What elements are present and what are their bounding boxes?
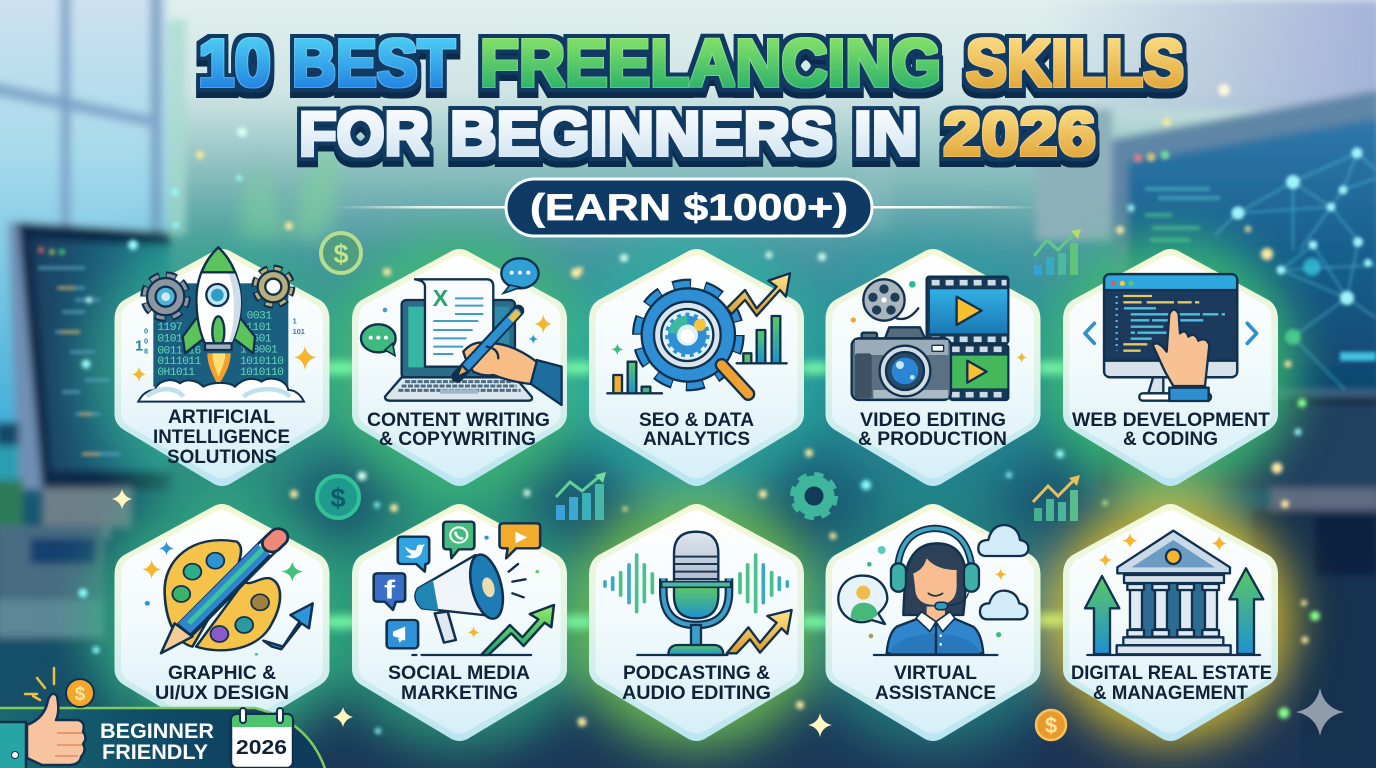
- title: 2026: [943, 100, 1096, 169]
- panel: seo and data analytics: [589, 249, 804, 486]
- title: BEST: [292, 26, 455, 101]
- panel: digital real estate and management: [1063, 504, 1278, 741]
- panel: social media marketing: [352, 504, 567, 741]
- label: UI/UX DESIGN: [155, 682, 289, 704]
- icon: megaphone with social bubbles: f: [384, 575, 396, 604]
- icon: rocket launching: [132, 247, 317, 402]
- label: & MANAGEMENT: [1093, 682, 1248, 704]
- hexagon card: [352, 504, 567, 741]
- decoration: gear: [793, 475, 835, 517]
- icon: rocket launching: 0: [144, 336, 148, 345]
- decoration: growth chart gold: [1033, 475, 1080, 521]
- decoration: gold coin: $: [1045, 713, 1057, 738]
- title: IN: [854, 100, 918, 169]
- subtitle pill with flanking lines: (EARN $1000+): [530, 187, 848, 228]
- icon: camera, film strip and reel: [851, 277, 1027, 400]
- icon: rocket launching: 1: [293, 316, 297, 325]
- icon: laptop with document and pen: [361, 258, 562, 405]
- label: ANALYTICS: [643, 428, 750, 450]
- icon: monitor with code and pointing hand: [1085, 274, 1257, 401]
- panel: web development and coding: [1063, 249, 1278, 486]
- label: CONTENT WRITING: [367, 409, 550, 431]
- decoration: grey sparkle: [1296, 688, 1344, 736]
- label: SOCIAL MEDIA: [388, 662, 530, 684]
- label: [622, 662, 771, 704]
- icon: rocket launching: 1010110: [240, 356, 284, 368]
- badge text: BEGINNER: [100, 720, 214, 743]
- icon: rocket launching: 10601: [240, 334, 272, 346]
- title: FOR: [299, 100, 429, 169]
- icon: microphone with sound waves: [605, 532, 792, 655]
- hexagon card: [589, 504, 804, 741]
- hexagon card: [114, 249, 330, 486]
- label: SEO & DATA: [639, 409, 754, 431]
- subtitle pill with flanking lines: [334, 179, 1040, 236]
- label: [875, 662, 996, 704]
- decoration: dollar coin middle: $: [330, 483, 346, 513]
- decoration: growth chart centre-left: [556, 472, 606, 520]
- decoration: gold coin: [1036, 710, 1066, 740]
- icon: rocket launching: 0011 16: [157, 345, 202, 357]
- label: & CODING: [1123, 428, 1218, 450]
- badge text: [100, 720, 214, 764]
- badge: beginner friendly: [0, 668, 327, 768]
- label: [858, 409, 1007, 450]
- icon: rocket launching: 1010110: [240, 367, 284, 379]
- label: VIDEO EDITING: [860, 409, 1006, 431]
- hexagon card: [826, 249, 1040, 486]
- decoration: green light streaks between panels: [317, 362, 1072, 628]
- label: [153, 406, 290, 468]
- icon: calendar 2026: [231, 708, 293, 768]
- title: 10: [198, 26, 271, 101]
- panel: podcasting and audio editing: [589, 504, 804, 741]
- icon: gear magnifier and charts: [607, 273, 790, 394]
- decoration: pale sparkles: [112, 489, 832, 737]
- banner shape: [0, 708, 327, 768]
- icon: rocket launching: 1 0001: [240, 345, 278, 357]
- icon: calendar 2026: 2026: [236, 737, 287, 759]
- icon: thumbs up: [0, 668, 94, 768]
- icon: megaphone with social bubbles: [374, 522, 554, 655]
- label: AUDIO EDITING: [622, 682, 771, 704]
- panel: content writing and copywriting: [352, 249, 567, 486]
- title: FREELANCING: [480, 26, 941, 101]
- label: & PRODUCTION: [858, 428, 1007, 450]
- label: SOLUTIONS: [167, 446, 277, 468]
- icon: rocket launching: 0: [144, 326, 148, 335]
- label: DIGITAL REAL ESTATE: [1071, 662, 1272, 684]
- title: BEGINNERS: [450, 100, 833, 169]
- label: PODCASTING &: [623, 662, 770, 684]
- hexagon card: [114, 504, 330, 741]
- hexagon card: [589, 249, 804, 486]
- label: ARTIFICIAL: [168, 406, 275, 428]
- decoration: right screen code and network: [1134, 148, 1376, 390]
- label: GRAPHIC &: [168, 662, 276, 684]
- label: WEB DEVELOPMENT: [1072, 409, 1270, 431]
- icon: rocket launching: 0H1011: [157, 367, 195, 379]
- hexagon card: [352, 249, 567, 486]
- icon: rocket launching: 11101: [240, 322, 272, 334]
- hexagon card: [1063, 504, 1278, 741]
- panel: video editing and production: [826, 249, 1040, 486]
- label: & COPYWRITING: [379, 428, 536, 450]
- panel: virtual assistance: [826, 504, 1040, 741]
- icon: rocket launching: 0111011: [157, 356, 202, 368]
- decoration: glowing particles: [78, 84, 1320, 734]
- icon: bank building with arrows: [1085, 531, 1263, 655]
- icon: palette, pencil and arrow: [142, 537, 313, 656]
- decoration: dollar coin middle: [317, 476, 359, 518]
- hexagon card: [1063, 249, 1278, 486]
- icon: rocket launching: 0101: [157, 334, 183, 346]
- decoration: dollar coin top: $: [333, 239, 349, 269]
- label: INTELLIGENCE: [153, 426, 290, 448]
- icon: rocket launching: 0031: [247, 310, 272, 322]
- decoration: left monitor code lines: [38, 246, 120, 454]
- label: [388, 662, 530, 704]
- label: VIRTUAL: [894, 662, 977, 684]
- title: SKILLS: [966, 26, 1184, 101]
- panel: artificial intelligence solutions: [114, 247, 330, 486]
- decoration: dollar coin top: [321, 233, 361, 273]
- label: MARKETING: [401, 682, 518, 704]
- panel: graphic and ui/ux design: [114, 504, 330, 741]
- icon: thumbs up: $: [75, 684, 86, 705]
- label: [367, 409, 550, 450]
- icon: rocket launching: 101: [293, 327, 305, 336]
- decoration: growth chart top right: [1034, 229, 1081, 275]
- label: [639, 409, 754, 450]
- title: [198, 26, 1184, 169]
- badge text: FRIENDLY: [102, 741, 208, 764]
- icon: rocket launching: 1: [135, 339, 143, 355]
- hexagon card: [826, 504, 1040, 741]
- label: ASSISTANCE: [875, 682, 996, 704]
- icon: headset assistant: [838, 525, 1028, 655]
- label: [1071, 662, 1272, 704]
- icon: rocket launching: 1197: [157, 322, 182, 334]
- label: [1072, 409, 1270, 450]
- label: [155, 662, 289, 704]
- icon: laptop with document and pen: X: [433, 285, 449, 311]
- icon: rocket launching: 8: [144, 346, 148, 355]
